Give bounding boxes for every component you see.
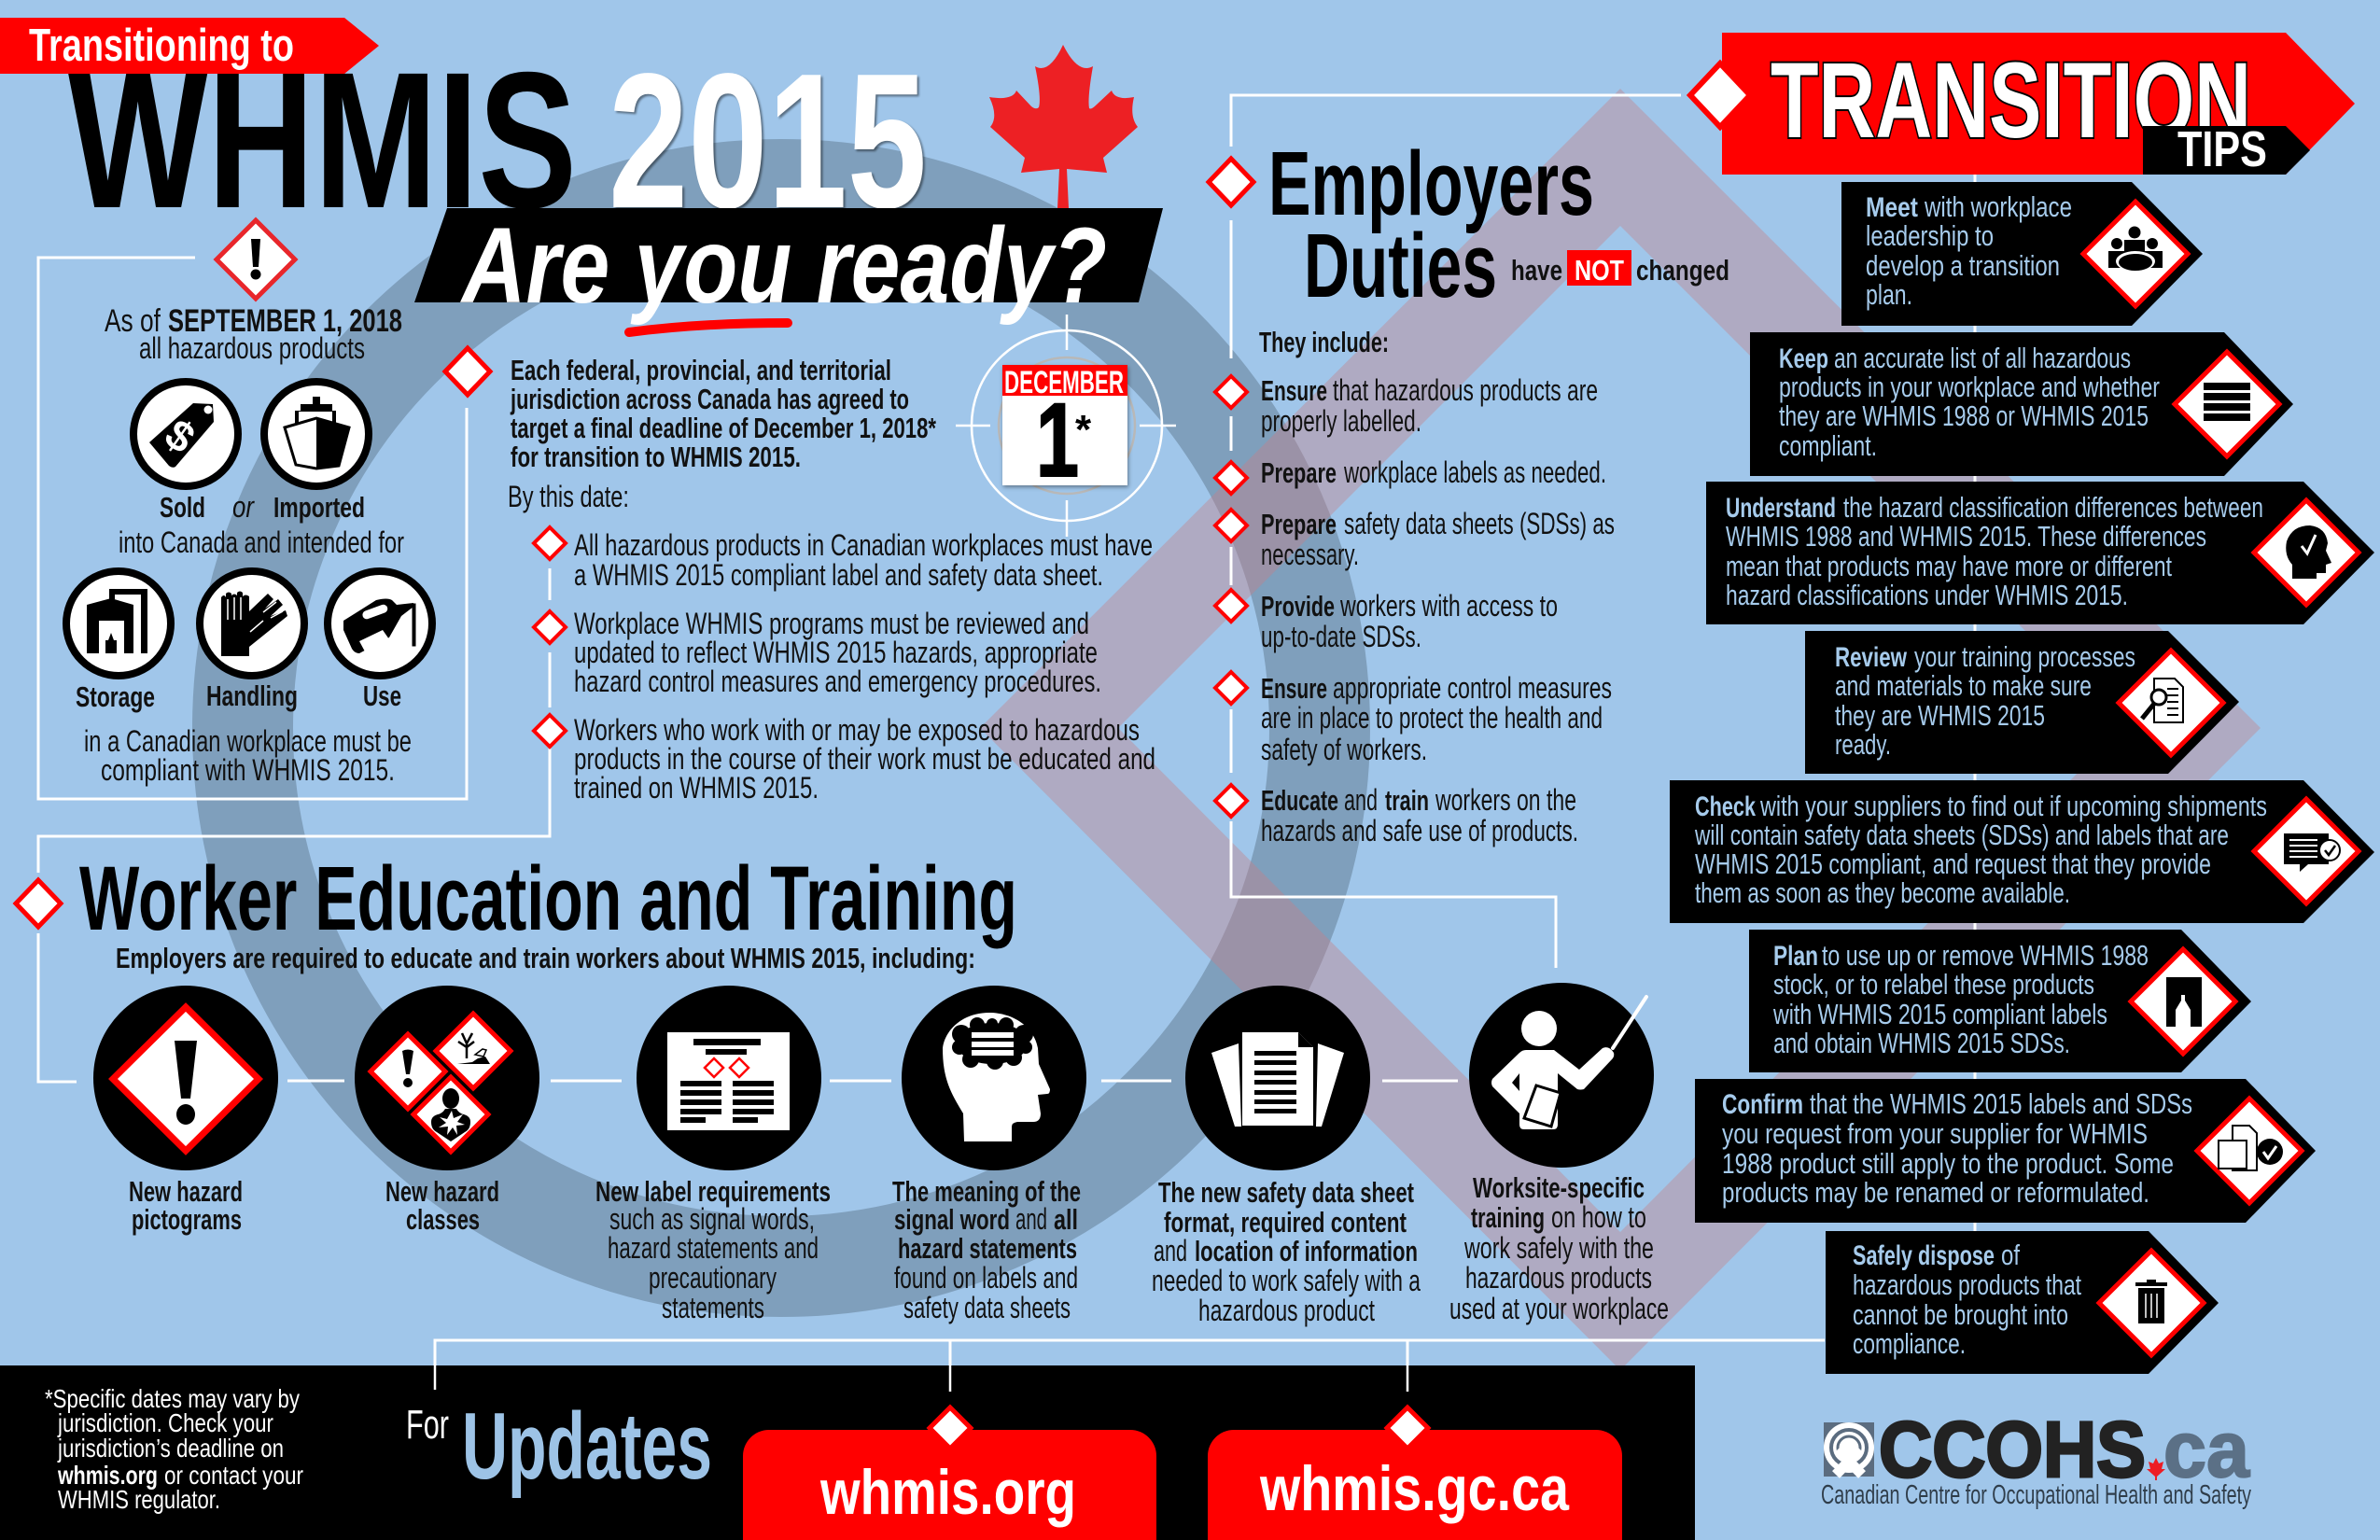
tip: Confirm: you request from your supplier for WHMIS [1722,1117,2148,1150]
tip: Review: your training processes [1914,640,2135,673]
training item: new label requirements: precautionary [649,1261,777,1295]
icon: three hazard diamonds [355,986,539,1170]
tip: Keep: compliant. [1779,429,1877,462]
icon: documents with check [2197,1099,2302,1203]
tip: Plan: stock, or to relabel these products [1773,968,2094,1001]
icon: head with check [2254,500,2359,605]
tip: Review [1805,631,2239,774]
training item: signal word meaning: found on labels and [894,1261,1078,1295]
icon: bullet diamond [1215,590,1247,622]
panel: as of September 1, 2018: Sold [160,491,205,524]
training item: worksite-specific training: on how to [1551,1200,1646,1234]
tip: Check: them as soon as they become available. [1695,876,2070,909]
tip: Safely dispose: Safely dispose [1853,1240,1995,1271]
icon: bullet diamond [1215,510,1247,541]
tip: Keep: Keep [1779,343,1828,374]
heading: Employers Duties: Duties [1304,215,1497,316]
icon: list [2175,352,2279,456]
list: employer duties: appropriate control measures [1333,671,1612,705]
icon: bullet diamond [534,715,566,747]
training item: safety data sheet: needed to work safely with a [1152,1264,1421,1297]
list: employer duties: hazards and safe use of products. [1261,814,1578,847]
icon: label [637,986,821,1170]
training item: new label requirements: such as signal words, [609,1202,815,1236]
training item: signal word meaning: The meaning of the [892,1175,1081,1208]
list: employer duties: workers on the [1435,783,1576,817]
icon: trash can [2099,1251,2204,1355]
tip: Meet [1841,182,2203,326]
icon: use fuel can [328,571,432,676]
tip: Meet: Meet [1866,192,1918,223]
connector lines [38,95,1975,1392]
training item: safety data sheet [1152,986,1421,1327]
training item: safety data sheet: The new safety data sheet [1158,1176,1414,1209]
tip: Safely dispose [1826,1231,2219,1374]
list: employer duties: Prepare [1261,456,1337,489]
logo: CCOHS.ca: ca [2163,1406,2250,1493]
training item: new hazard classes [355,986,539,1236]
icon: storage [66,571,171,676]
tip: Confirm: products may be renamed or reformulated. [1722,1176,2149,1209]
icon: trainer with pointer [1469,983,1654,1168]
tip: Plan: to use up or remove WHMIS 1988 [1822,939,2149,972]
icon: imported ship [264,382,369,486]
footnote [45,1384,303,1514]
icon: calendar December 1: * [1075,407,1092,453]
link button: whmis.gc.ca [1208,1407,1622,1540]
icon: sold price tag [133,382,238,486]
tip: Confirm: that the WHMIS 2015 labels and SDSs [1810,1087,2192,1120]
tip: Keep: products in your workplace and whether [1779,371,2160,403]
heading: Worker Education and Training: Worker Education and Training [79,847,1017,949]
background diamond outline [980,89,2261,1370]
training item: new label requirements: statements [662,1291,764,1324]
icon: bullet diamond [1215,462,1247,494]
tip: Safely dispose: of [2001,1239,2020,1271]
heading: Worker Education and Training [16,847,1017,974]
icon: section diamond [1209,159,1253,205]
training item: worksite-specific training [1449,983,1669,1325]
training item: new hazard classes: New hazard [385,1175,499,1208]
footnote: WHMIS regulator. [58,1485,220,1514]
icon: heading diamond [1690,63,1750,127]
tip: Safely dispose: cannot be brought into [1853,1298,2068,1331]
footer band [0,1365,1695,1540]
list: employer duties: Ensure [1261,374,1327,407]
tip: Meet: develop a transition [1866,249,2060,282]
training item: safety data sheet: hazardous product [1198,1294,1375,1327]
footnote: *Specific dates may vary by [45,1384,300,1413]
heading: Employers Duties: changed [1636,254,1729,287]
icon: CCOHS emblem [1824,1422,1874,1477]
icon: document and magnifier [2119,651,2223,755]
list: employer duties: Prepare [1261,508,1337,540]
icon: calendar December 1: 1 [1036,382,1079,498]
panel: as of September 1, 2018: Imported [273,491,365,524]
panel: December 1 deadline: target a final deadline of December 1, 2018* [511,412,937,444]
tip: Safely dispose: hazardous products that [1853,1268,2081,1301]
panel: as of September 1, 2018: Use [363,679,401,712]
tip: Keep: an accurate list of all hazardous [1834,342,2131,374]
training item: new hazard pictograms: pictograms [132,1203,242,1236]
heading: Employers Duties: NOT [1575,254,1624,287]
icon: bullet diamond [534,611,566,643]
training item: safety data sheet: format, required content [1164,1206,1407,1239]
icon: speech bubble with check [2254,799,2359,903]
panel: December 1 deadline: Workers who work with or may be exposed to hazardous [574,713,1140,747]
tip: Safely dispose: compliance. [1853,1327,1966,1360]
list: employer duties: Educate [1261,784,1338,817]
training item: new label requirements: New label requirements [595,1175,831,1208]
footnote: whmis.org [57,1461,158,1490]
panel: December 1 deadline: for transition to WHMIS 2015. [511,441,801,473]
title: WHMIS 2015: WHMIS [68,33,577,249]
training item: safety data sheet: location of information [1195,1235,1418,1267]
panel: December 1 deadline: trained on WHMIS 2015. [574,771,819,805]
list: employer duties: workplace labels as needed. [1343,455,1606,489]
tip: Check: Check [1695,791,1756,822]
icon: head with brain [902,986,1086,1170]
heading: Transition Tips: TIPS [2177,121,2267,177]
panel: December 1 deadline: All hazardous products in Canadian workplaces must have [574,528,1153,562]
tip: Review: Review [1835,642,1907,673]
training item: safety data sheet: and [1154,1234,1187,1267]
training item: new hazard pictograms [93,986,278,1236]
background ring [243,189,1320,1267]
training item: worksite-specific training: work safely with the [1463,1231,1654,1265]
panel: as of September 1, 2018: or [232,490,255,524]
panel: as of September 1, 2018: into Canada and intended for [119,525,404,559]
tip: Plan: and obtain WHMIS 2015 SDSs. [1773,1027,2070,1059]
logo: CCOHS.ca [1821,1406,2251,1510]
icon: drum and bottle [2131,949,2235,1054]
tip: Understand: WHMIS 1988 and WHMIS 2015. These differences [1726,520,2206,553]
training item: worksite-specific training: Worksite-specific [1473,1171,1645,1204]
tip: Meet: plan. [1866,278,1912,311]
icon: exclamation diamond [217,220,295,299]
training item: signal word meaning: and [1015,1202,1047,1236]
list: employer duties [1215,326,1615,847]
heading: Worker Education and Training: Employers are required to educate and train workers about WHMIS 2015, including: [116,942,975,974]
list: employer duties: and [1344,783,1378,817]
training item: new label requirements: hazard statements and [608,1231,819,1265]
tip: Review: they are WHMIS 2015 [1835,699,2045,732]
panel: as of September 1, 2018: compliant with WHMIS 2015. [101,753,395,787]
tip: Confirm: 1988 product still apply to the product. Some [1722,1147,2174,1180]
list: employer duties: Ensure [1261,672,1327,705]
icon: maple leaf [989,45,1138,208]
heading: Employers Duties [1209,133,1729,316]
panel: as of September 1, 2018: all hazardous products [139,331,365,365]
training item: worksite-specific training: training [1471,1201,1545,1234]
tip: Plan [1749,930,2251,1072]
line segments over footer [435,1365,1407,1392]
list: employer duties: up-to-date SDSs. [1261,620,1421,653]
tip: Review: and materials to make sure [1835,669,2092,702]
icon: hazard pictogram [93,986,278,1170]
training item: new label requirements [595,986,831,1324]
training item: signal word meaning: safety data sheets [903,1291,1071,1324]
panel: as of September 1, 2018: SEPTEMBER 1, 2018 [168,303,402,339]
panel: as of September 1, 2018: in a Canadian workplace must be [84,724,412,758]
panel: December 1 deadline: a WHMIS 2015 compliant label and safety data sheet. [574,558,1103,592]
logo: CCOHS.ca: CCOHS [1879,1406,2146,1493]
panel: December 1 deadline: By this date: [508,480,629,513]
tip: Understand: mean that products may have more or different [1726,550,2172,582]
footnote: jurisdiction’s deadline on [57,1434,284,1463]
panel: December 1 deadline: updated to reflect WHMIS 2015 hazards, appropriate [574,636,1098,669]
panel: December 1 deadline: hazard control measures and emergency procedures. [574,665,1101,698]
icon: calendar December 1: DECEMBER [1004,365,1124,400]
link button: whmis.org: whmis.org [819,1457,1076,1528]
tip: Plan: with WHMIS 2015 compliant labels [1772,998,2107,1030]
panel: as of September 1, 2018 [66,220,432,787]
panel: December 1 deadline: Workplace WHMIS programs must be reviewed and [574,607,1089,640]
heading: For Updates: For [406,1402,449,1448]
tip: Understand [1706,482,2374,624]
tip: Confirm [1695,1079,2316,1223]
training item: worksite-specific training: hazardous products [1465,1261,1652,1295]
icon: sold price tag: $ [157,409,203,463]
icon: section diamond [445,348,490,395]
icon: bullet diamond [1215,672,1247,704]
panel: December 1 deadline [445,348,1155,805]
icon: bullet diamond [534,527,566,559]
panel: as of September 1, 2018: Handling [206,679,298,712]
list: employer duties: workers with access to [1339,589,1558,623]
panel: as of September 1, 2018: As of [105,303,161,339]
tip: Plan: Plan [1773,941,1818,972]
panel: December 1 deadline: Each federal, provincial, and territorial [511,354,891,386]
list: employer duties: They include: [1259,326,1389,358]
icon: small maple leaf [2147,1458,2165,1480]
heading: For Updates: Updates [462,1394,712,1499]
training item: new hazard classes: classes [406,1203,480,1236]
tip: Keep: they are WHMIS 1988 or WHMIS 2015 [1779,399,2149,432]
tip: Understand: hazard classifications under WHMIS 2015. [1726,579,2128,611]
training item: worksite-specific training: used at your workplace [1449,1292,1669,1325]
banner: Are you ready?: Are you ready? [460,206,1107,326]
training item: signal word meaning [892,986,1086,1324]
icon: documents [1185,986,1370,1170]
icon: handling gloves [200,571,304,676]
footnote: or contact your [164,1461,303,1490]
list: employer duties: that hazardous products are [1333,373,1598,407]
training item: signal word meaning: hazard statements [898,1232,1077,1265]
heading: For Updates [406,1394,712,1499]
training item: signal word meaning: all [1054,1203,1078,1236]
icon: bullet diamond [1215,785,1247,817]
list: employer duties: properly labelled. [1261,404,1421,438]
list: employer duties: safety data sheets (SDSs) as [1344,507,1615,540]
banner: Transitioning to: Transitioning to [29,21,294,71]
tip: Meet: leadership to [1866,219,1994,252]
tip: Review: ready. [1835,728,1891,761]
training item: signal word meaning: signal word [894,1203,1010,1236]
tip: Understand: Understand [1726,493,1836,524]
panel: December 1 deadline: jurisdiction across Canada has agreed to [510,383,909,415]
heading: Employers Duties: have [1511,254,1562,287]
heading: Employers Duties: Employers [1268,133,1594,234]
tip: Keep [1750,332,2293,476]
list: employer duties: necessary. [1261,538,1359,571]
icon: bullet diamond [1215,376,1247,408]
tip: Check [1670,780,2374,923]
icon: meeting [2083,202,2188,306]
title: WHMIS 2015: 2015 [609,34,927,248]
link button: whmis.org [743,1407,1156,1540]
list: employer duties: Provide [1261,590,1335,623]
panel: as of September 1, 2018: Storage [76,680,155,713]
link button: whmis.gc.ca: whmis.gc.ca [1259,1453,1570,1524]
footnote: jurisdiction. Check your [57,1408,273,1437]
tip: Meet: with workplace [1924,190,2072,223]
icon: section diamond [16,880,61,927]
list: employer duties: train [1385,784,1429,817]
icon: calendar December 1 [956,315,1176,537]
list: employer duties: safety of workers. [1261,733,1427,766]
training item: new hazard pictograms: New hazard [129,1175,243,1208]
tip: Check: WHMIS 2015 compliant, and request that they provide [1695,847,2211,880]
list: employer duties: are in place to protect the health and [1261,701,1603,735]
panel: December 1 deadline: products in the course of their work must be educated and [574,742,1155,776]
tip: Confirm: Confirm [1722,1089,1803,1120]
